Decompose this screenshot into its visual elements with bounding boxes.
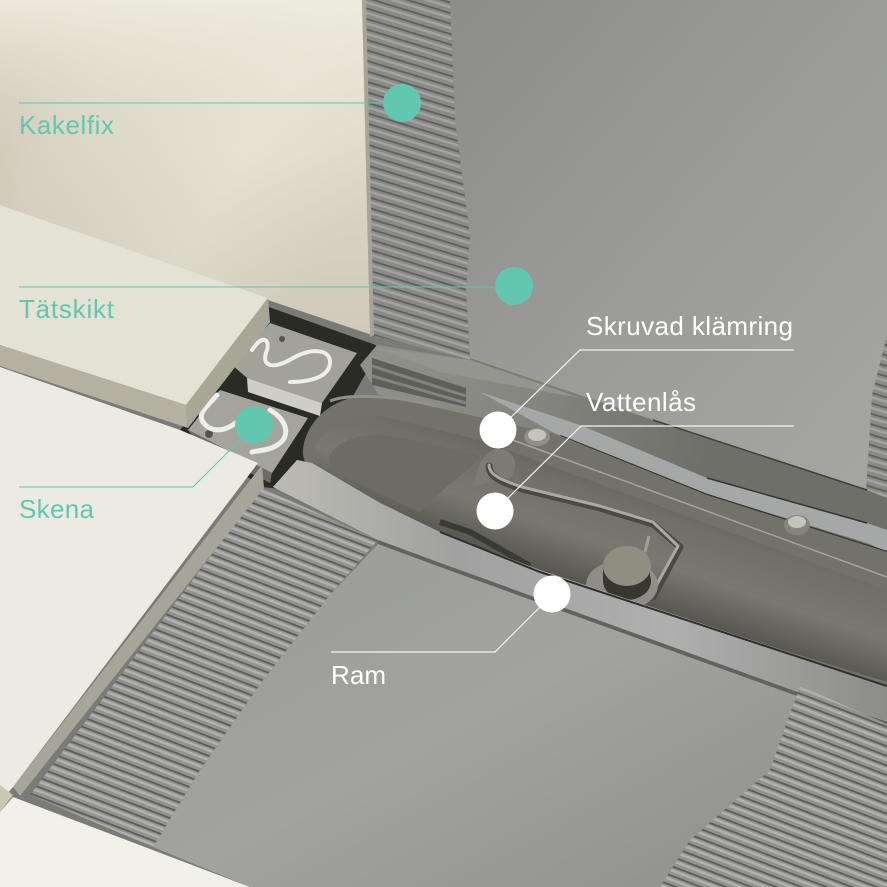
panel: drain basin rim	[303, 395, 887, 690]
squiggle: sealant on plate two	[201, 395, 286, 452]
callout: Skruvad klämring	[480, 311, 794, 448]
panel: upper wall adhesive	[362, 0, 470, 360]
callout: Tätskikt	[19, 267, 533, 324]
panel: rail plate two	[188, 390, 308, 483]
callout: Ram	[331, 576, 570, 690]
panel: lower left adhesive	[30, 488, 378, 847]
callout: Kakelfix: Kakelfix	[19, 110, 114, 140]
panel: floor membrane	[153, 544, 797, 887]
callout: Tätskikt: Tätskikt	[19, 294, 115, 324]
panel: floor tile two	[0, 367, 264, 812]
icon: lower wire clip	[440, 522, 530, 566]
panel: floor tile one	[0, 205, 270, 428]
callout: Skena	[19, 406, 273, 524]
callout: Vattenlås: Vattenlås	[586, 387, 696, 417]
callout: Kakelfix	[19, 84, 421, 140]
callout: Vattenlås	[476, 387, 794, 530]
icon: water trap wire	[474, 448, 680, 602]
callout: Skena: Skena	[19, 494, 95, 524]
icon: screw right	[784, 515, 810, 535]
callout: Skruvad klämring: Skruvad klämring	[586, 311, 793, 341]
panel: drain basin interior	[312, 396, 887, 682]
panel: lower frame strip	[273, 460, 887, 725]
panel: shadow gap behind rails	[180, 306, 390, 490]
panel: wall membrane	[450, 0, 887, 500]
icon: screw left	[524, 428, 550, 446]
panel: rail plate one	[232, 323, 357, 416]
panel: wall tile	[0, 0, 374, 337]
squiggle: sealant on plate one	[252, 340, 330, 382]
icon: drain plug	[586, 536, 658, 610]
panel: right adhesive strip	[866, 335, 887, 498]
panel: upper frame and reflection	[360, 345, 887, 560]
panel: floor tile bottom	[0, 797, 250, 887]
panel: lower right adhesive	[660, 686, 887, 887]
callout: Ram: Ram	[331, 660, 386, 690]
